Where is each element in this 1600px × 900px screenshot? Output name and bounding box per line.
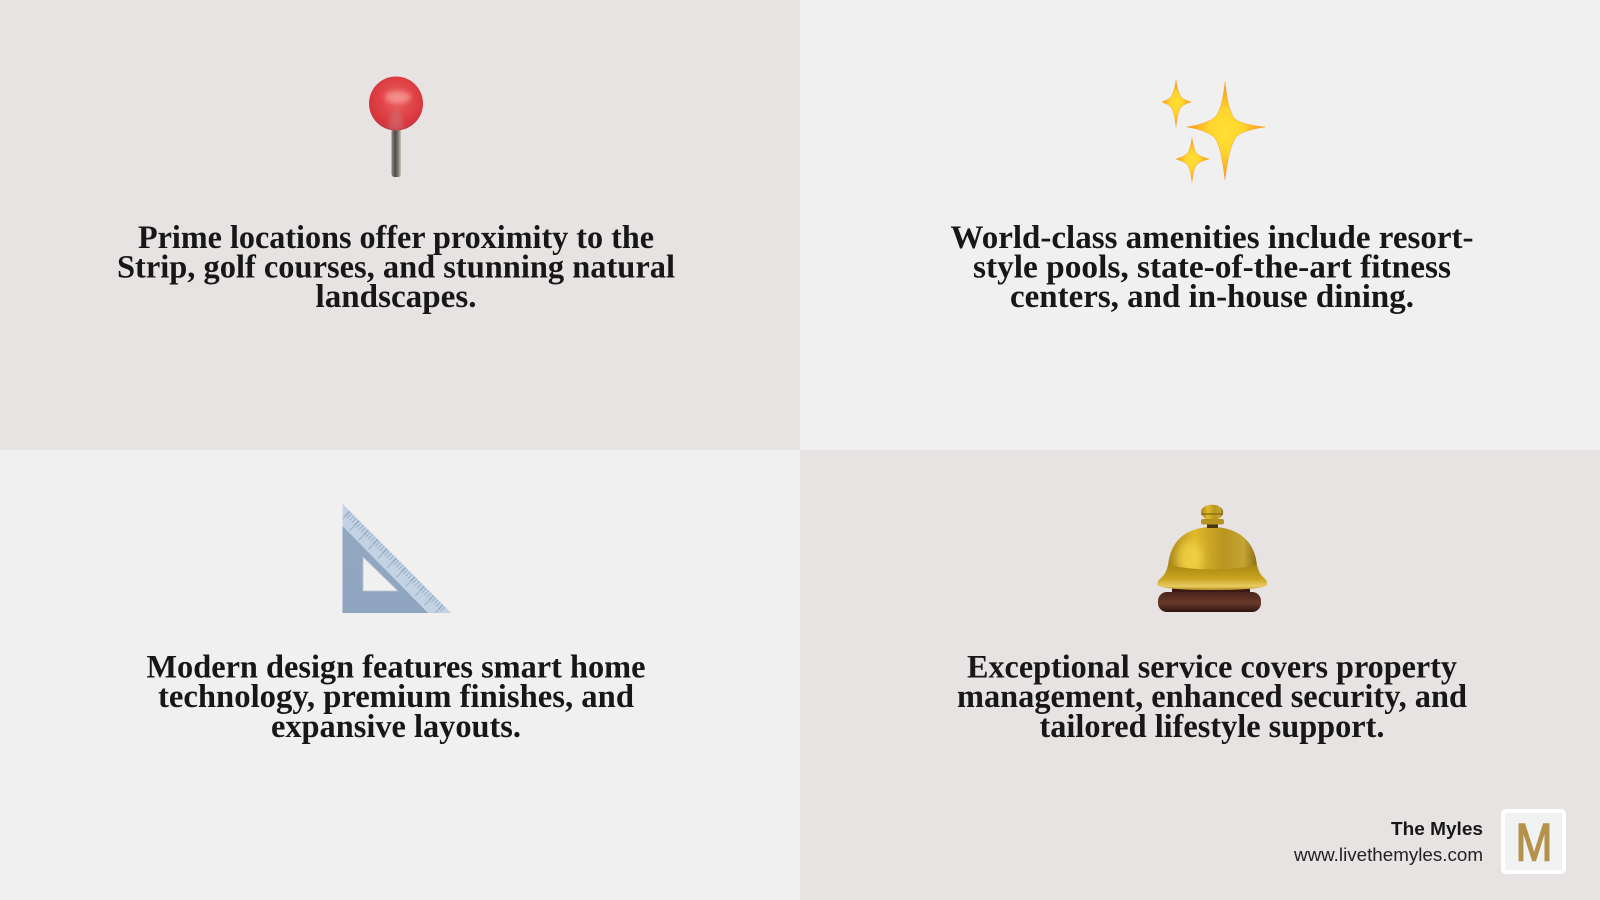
heading: modern design text: Modern design features smart home bbox=[146, 650, 646, 686]
footer: brand name and website: The Myles bbox=[1391, 818, 1483, 839]
footer: brand name and website bbox=[1293, 818, 1483, 865]
heading: prime locations text: landscapes. bbox=[316, 279, 476, 315]
icon: triangular ruler bbox=[342, 504, 451, 613]
heading: prime locations text: Strip, golf courses, and stunning natural bbox=[117, 250, 675, 286]
footer: brand name and website: www.livethemyles.com bbox=[1293, 845, 1483, 865]
heading: modern design text: technology, premium finishes, and bbox=[158, 679, 634, 715]
heading: amenities text: World-class amenities include resort- bbox=[950, 220, 1474, 256]
panel: exceptional service bbox=[800, 450, 1600, 900]
heading: exceptional service text: Exceptional service covers property bbox=[967, 650, 1457, 686]
panel: modern design bbox=[147, 504, 645, 744]
heading: amenities text: centers, and in-house dining. bbox=[1010, 279, 1414, 315]
heading: amenities text: style pools, state-of-the-art fitness bbox=[973, 250, 1451, 286]
heading: modern design text bbox=[146, 650, 646, 745]
logo: M badge: M bbox=[1516, 814, 1552, 872]
heading: exceptional service text: management, enhanced security, and bbox=[957, 679, 1467, 715]
heading: exceptional service text: tailored lifestyle support. bbox=[1040, 709, 1384, 745]
heading: amenities text bbox=[950, 220, 1474, 315]
icon: bellhop bell bbox=[1157, 505, 1267, 612]
icon: sparkles bbox=[1162, 80, 1265, 182]
heading: prime locations text bbox=[117, 220, 675, 315]
heading: exceptional service text bbox=[957, 650, 1467, 745]
icon: red round pushpin bbox=[369, 76, 423, 177]
heading: modern design text: expansive layouts. bbox=[271, 709, 521, 745]
panel: world-class amenities bbox=[800, 0, 1600, 450]
heading: prime locations text: Prime locations offer proximity to the bbox=[138, 220, 654, 256]
logo: M badge bbox=[1501, 809, 1566, 874]
panel: prime locations bbox=[0, 0, 800, 450]
